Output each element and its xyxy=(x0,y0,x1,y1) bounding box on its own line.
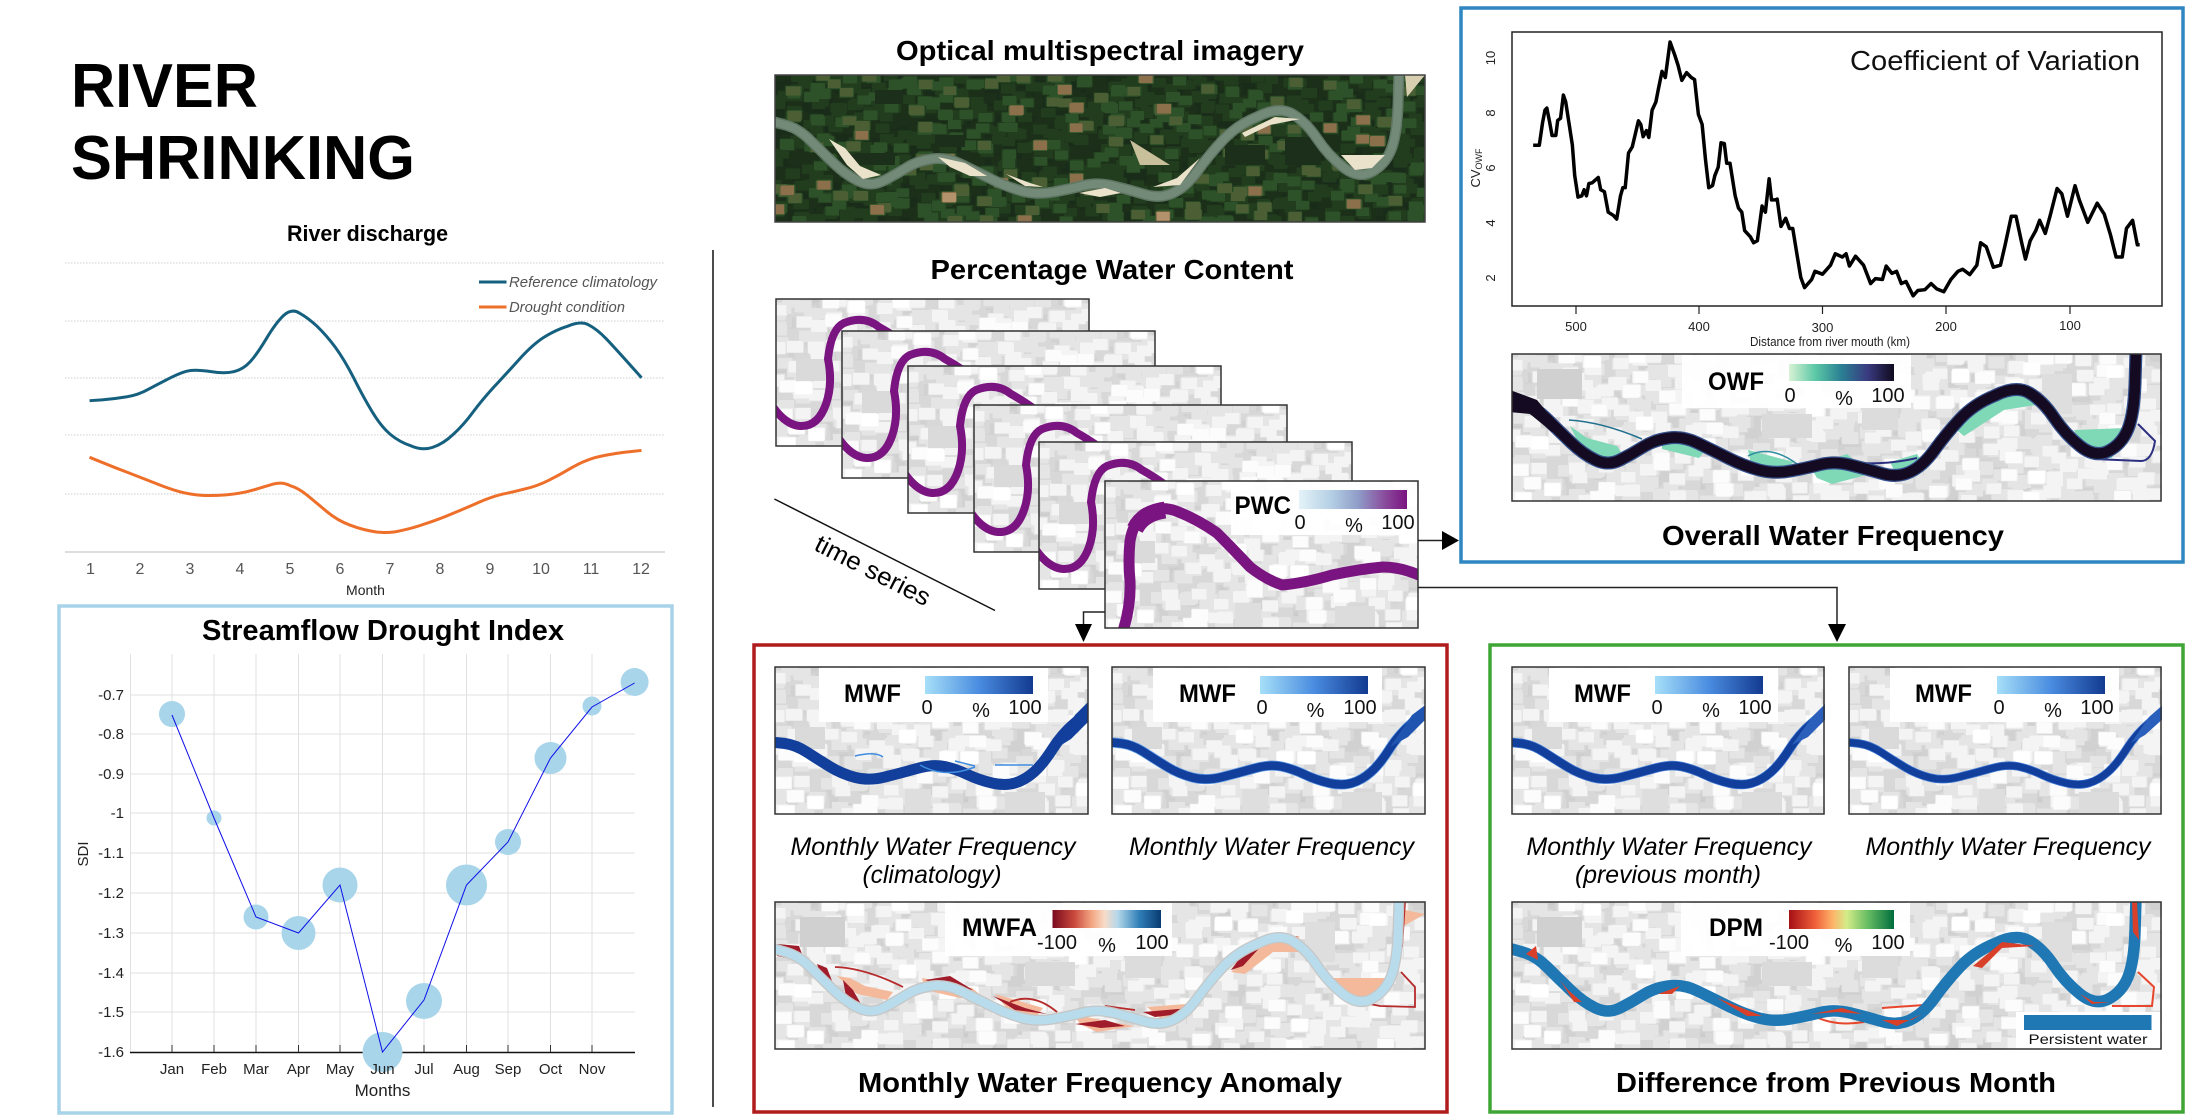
panel: streamflow drought index xyxy=(59,606,672,1113)
x axis labels xyxy=(86,561,650,598)
x axis labels: Feb xyxy=(201,1061,227,1078)
line: reference climatology xyxy=(90,311,642,449)
map: DPM xyxy=(1508,898,2162,1049)
divider xyxy=(712,250,714,1107)
chart: coefficient of variation: 8 xyxy=(1483,109,1498,117)
panel: difference from previous month xyxy=(1490,645,2183,1112)
chart: coefficient of variation: 300 xyxy=(1812,320,1833,335)
map: MWFA: 100 xyxy=(1135,932,1169,954)
map: MWFA: MWFA xyxy=(962,914,1037,942)
heading: percentage water content: Percentage Water Content xyxy=(930,254,1294,285)
map: MWF climatology: % xyxy=(972,700,990,722)
map: MWF previous month: MWF xyxy=(1574,680,1631,708)
heading: overall water frequency: Overall Water Frequency xyxy=(1662,520,2004,551)
panel: monthly water frequency anomaly xyxy=(754,645,1447,1112)
map: MWFA xyxy=(771,898,1425,1049)
map: overall water frequency: % xyxy=(1835,388,1853,410)
frame 6 with PWC legend: % xyxy=(1345,515,1363,537)
time series axis xyxy=(774,499,995,612)
frame 2 xyxy=(839,331,1155,478)
satellite image xyxy=(771,71,1425,222)
x axis labels: Nov xyxy=(579,1061,606,1078)
x axis labels: Mar xyxy=(243,1061,269,1078)
chart: coefficient of variation: 400 xyxy=(1688,319,1710,334)
map: MWF previous month xyxy=(1508,667,1830,814)
frame 6 with PWC legend: 0 xyxy=(1294,512,1306,534)
x axis labels: Aug xyxy=(453,1061,480,1078)
map: MWF climatology xyxy=(771,667,1093,814)
arrow to overall water frequency xyxy=(1418,531,1459,550)
frame 4 xyxy=(971,405,1287,552)
y axis labels: -1.2 xyxy=(98,885,124,902)
map: DPM: % xyxy=(1835,935,1853,957)
frame 5 xyxy=(1036,442,1352,589)
panel: overall water frequency xyxy=(1461,8,2183,562)
x axis labels: 10 xyxy=(532,561,550,578)
caption: climatology: (climatology) xyxy=(862,861,1002,889)
heading: river discharge: River discharge xyxy=(287,221,448,246)
chart: coefficient of variation: 200 xyxy=(1935,319,1957,334)
x axis labels: 12 xyxy=(632,561,650,578)
x axis labels xyxy=(160,1061,606,1100)
legend: Drought condition xyxy=(509,299,625,316)
frame 6 with PWC legend: PWC xyxy=(1234,492,1291,520)
line: drought condition xyxy=(90,450,642,532)
bubbles xyxy=(159,668,649,1072)
chart: coefficient of variation: 500 xyxy=(1565,319,1587,334)
map: MWFA: -100 xyxy=(1037,932,1077,954)
x axis labels: 5 xyxy=(286,561,295,578)
chart: coefficient of variation: OWF xyxy=(1474,148,1484,169)
heading: monthly water frequency anomaly: Monthly Water Frequency Anomaly xyxy=(858,1067,1342,1098)
x axis labels: 6 xyxy=(336,561,345,578)
x axis labels: May xyxy=(326,1061,355,1078)
x axis labels: Apr xyxy=(287,1061,310,1078)
frame 3 xyxy=(905,366,1221,513)
map: MWF current: 100 xyxy=(1343,697,1377,719)
x axis labels: 4 xyxy=(236,561,245,578)
map: MWF current: % xyxy=(2044,700,2062,722)
x axis labels: 11 xyxy=(583,561,599,578)
map: MWF current: MWF xyxy=(1179,680,1236,708)
chart: coefficient of variation: Coefficient of Variation xyxy=(1850,45,2140,76)
map: MWF previous month: % xyxy=(1702,700,1720,722)
map: MWF current xyxy=(1108,667,1430,814)
time series axis: time series xyxy=(810,530,935,612)
y axis labels xyxy=(75,687,124,1061)
caption: current month: Monthly Water Frequency xyxy=(1866,833,2152,861)
heading: streamflow drought index: Streamflow Drought Index xyxy=(202,615,564,647)
arrow to monthly water frequency anomaly xyxy=(1075,612,1105,642)
y axis labels: -1.5 xyxy=(98,1004,124,1021)
map: MWF current: 100 xyxy=(2080,697,2114,719)
x axis labels: Months xyxy=(355,1081,410,1100)
x axis labels: Sep xyxy=(495,1061,521,1078)
y axis labels: -1.1 xyxy=(98,845,124,862)
map: MWF current: % xyxy=(1307,700,1325,722)
caption: climatology: Monthly Water Frequency xyxy=(790,833,1077,861)
y axis labels: -1.6 xyxy=(98,1044,124,1061)
map: MWF current: MWF xyxy=(1915,680,1972,708)
map: MWF previous month: 0 xyxy=(1651,697,1663,719)
map: MWF current xyxy=(1845,667,2167,814)
map: MWF previous month: 100 xyxy=(1738,697,1772,719)
map: MWF climatology: MWF xyxy=(844,680,901,708)
caption: current month: Monthly Water Frequency xyxy=(1129,833,1415,861)
x axis labels: Jun xyxy=(370,1061,395,1078)
chart: coefficient of variation xyxy=(1468,32,2162,349)
map: overall water frequency xyxy=(1508,350,2162,501)
caption: climatology xyxy=(790,833,1077,889)
caption: previous month: Monthly Water Frequency xyxy=(1526,833,1813,861)
map: DPM: -100 xyxy=(1769,932,1809,954)
y axis labels: -1 xyxy=(111,805,124,822)
caption: previous month: (previous month) xyxy=(1575,861,1761,889)
chart: coefficient of variation: 100 xyxy=(2059,318,2081,333)
frame 6 with PWC legend xyxy=(1105,481,1421,631)
map: MWF current: 0 xyxy=(1256,697,1268,719)
chart: coefficient of variation: 4 xyxy=(1483,219,1498,227)
caption: previous month xyxy=(1526,833,1813,889)
map: MWF climatology: 0 xyxy=(921,697,933,719)
y axis labels: SDI xyxy=(75,841,92,867)
title: SHRINKING xyxy=(71,124,415,193)
map: overall water frequency: OWF xyxy=(1708,368,1764,396)
map: DPM: 100 xyxy=(1871,932,1905,954)
persistent water legend xyxy=(2016,1012,2161,1049)
y axis labels: -0.8 xyxy=(98,726,124,743)
x axis labels: 9 xyxy=(486,561,495,578)
heading: optical multispectral imagery: Optical multispectral imagery xyxy=(896,35,1304,66)
persistent water legend: Persistent water xyxy=(2028,1031,2148,1047)
chart: coefficient of variation: 2 xyxy=(1483,274,1498,282)
x axis labels: Month xyxy=(346,582,385,598)
SDI line xyxy=(172,683,635,1052)
chart: coefficient of variation: Distance from river mouth (km) xyxy=(1750,334,1910,349)
y axis labels: -1.4 xyxy=(98,965,124,982)
chart: coefficient of variation: 6 xyxy=(1483,164,1498,172)
heading: difference from previous month: Difference from Previous Month xyxy=(1616,1067,2056,1098)
chart: coefficient of variation: CV xyxy=(1468,169,1483,188)
y axis labels: -0.9 xyxy=(98,766,124,783)
x axis labels: Jan xyxy=(160,1061,184,1078)
map: MWF climatology: 100 xyxy=(1008,697,1042,719)
x axis labels: 3 xyxy=(186,561,195,578)
x axis labels: 2 xyxy=(136,561,145,578)
frame 1 xyxy=(773,299,1089,446)
time series image stack xyxy=(773,299,1421,631)
map: overall water frequency: 0 xyxy=(1784,385,1796,407)
title xyxy=(71,52,415,193)
x axis labels: 1 xyxy=(86,561,95,578)
x axis labels: 7 xyxy=(386,561,395,578)
chart: coefficient of variation: 10 xyxy=(1483,51,1498,65)
x axis labels: Jul xyxy=(414,1061,434,1078)
panel: river discharge line chart xyxy=(65,221,665,598)
x axis labels: 8 xyxy=(436,561,445,578)
title: RIVER xyxy=(71,52,258,121)
arrow to difference from previous month xyxy=(1418,588,1846,642)
map: overall water frequency: 100 xyxy=(1871,385,1905,407)
map: DPM: DPM xyxy=(1709,914,1763,942)
y axis labels: -1.3 xyxy=(98,925,124,942)
legend: Reference climatology xyxy=(509,274,658,291)
y axis labels: -0.7 xyxy=(98,687,124,704)
legend xyxy=(479,274,658,316)
map: MWF current: 0 xyxy=(1993,697,2005,719)
x axis labels: Oct xyxy=(539,1061,563,1078)
map: MWFA: % xyxy=(1098,935,1116,957)
frame 6 with PWC legend: 100 xyxy=(1381,512,1415,534)
